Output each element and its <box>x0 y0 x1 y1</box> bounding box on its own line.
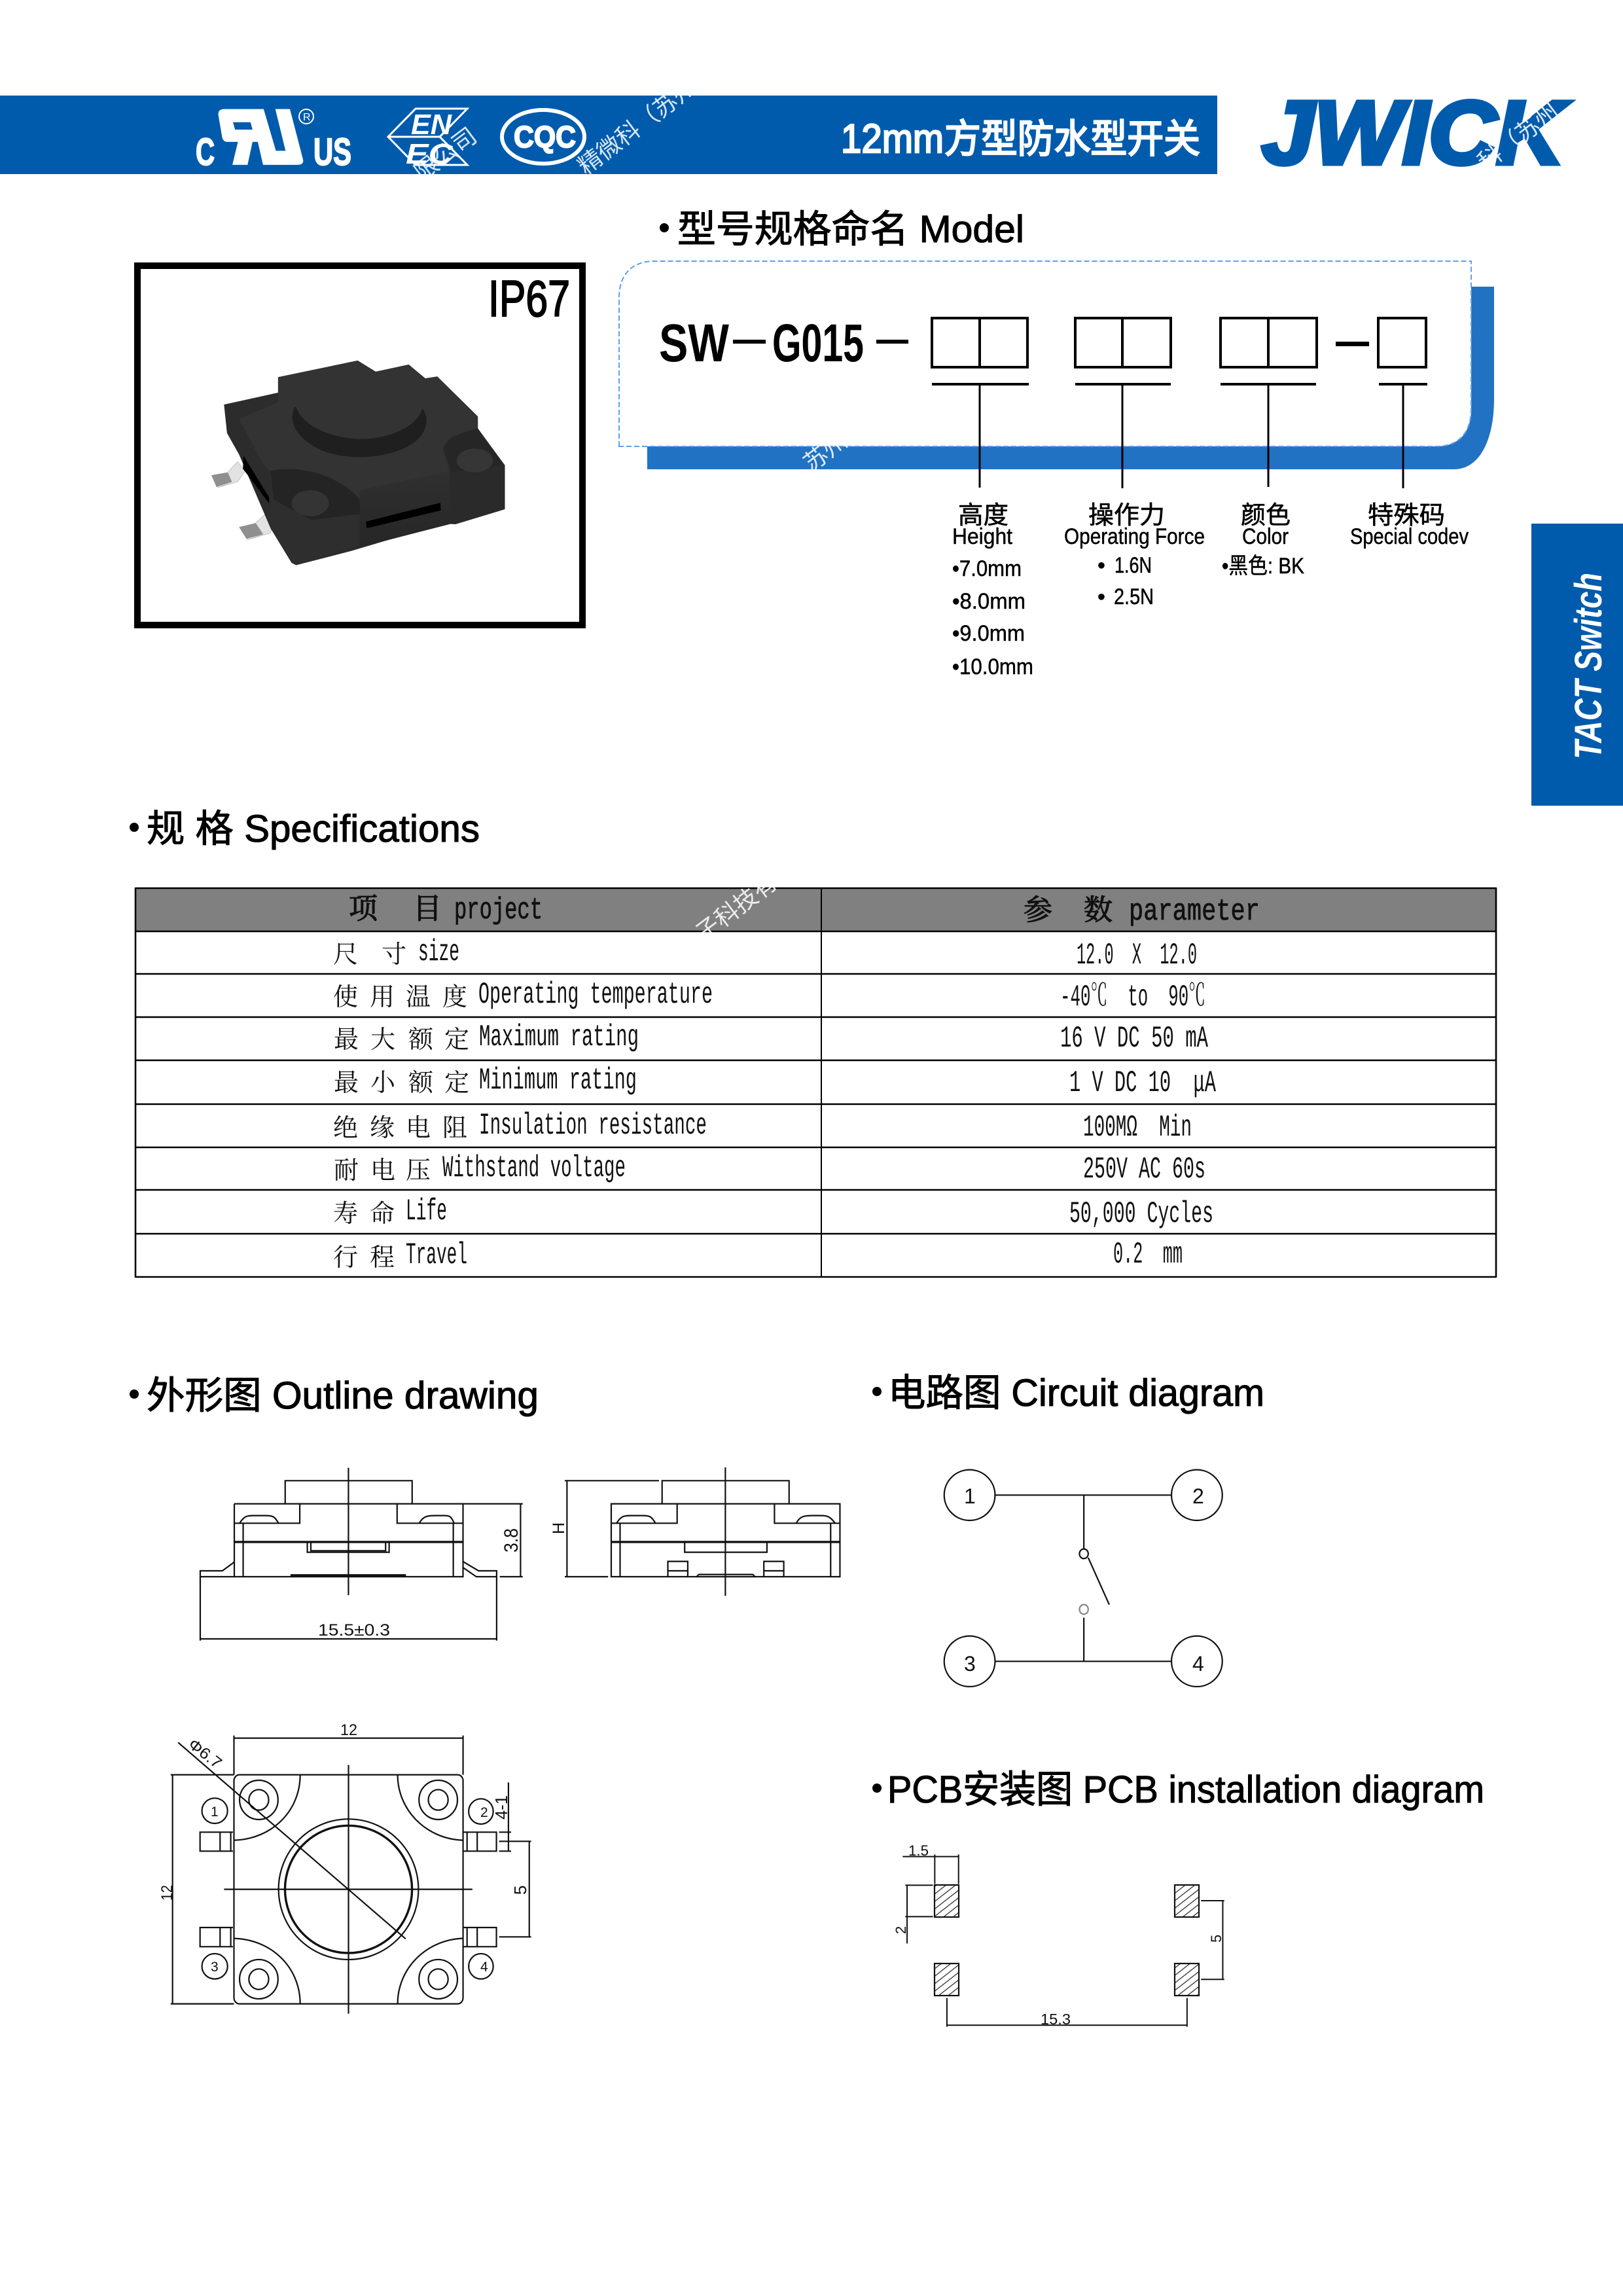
heading: Outline drawing: 外形图 Outline drawing <box>147 1374 539 1417</box>
terminal numbers: 4 <box>1192 1652 1204 1676</box>
row: insulation resistance: 100MΩ Min <box>1083 1111 1192 1145</box>
terminal numbers <box>964 1484 1204 1676</box>
model prefix SW-G015: SW <box>659 314 729 373</box>
column: color: Color <box>1242 524 1289 549</box>
row: travel <box>333 1238 1183 1272</box>
dimension: 5: 5 <box>510 1886 530 1895</box>
logo: JWICK: JWICK <box>1262 83 1570 183</box>
row: operating temperature <box>333 978 1205 1014</box>
row: life: 寿命 <box>333 1200 395 1228</box>
header band <box>0 96 1217 174</box>
leader lines <box>932 384 1427 488</box>
solder pads <box>935 1885 1199 1996</box>
row: operating temperature: Operating temperature <box>478 978 713 1012</box>
row: travel: 0.2 mm <box>1113 1238 1183 1272</box>
row: life: 50,000 Cycles <box>1069 1197 1213 1231</box>
table header: project: project <box>454 893 543 927</box>
row: travel: Travel <box>406 1238 467 1272</box>
row: size <box>333 935 1197 973</box>
column: height <box>952 495 1033 679</box>
dimension: 12 width: 12 <box>340 1721 357 1739</box>
row: travel: 行程 <box>333 1244 395 1272</box>
row: size: size <box>418 935 459 969</box>
row: withstand voltage <box>334 1151 1205 1187</box>
row: size: 尺寸 <box>333 941 406 969</box>
row: withstand voltage: Withstand voltage <box>442 1151 626 1185</box>
column: special code: Special codev <box>1350 524 1469 549</box>
column: height: Height <box>952 524 1013 549</box>
pin numbers: 4 <box>480 1960 488 1975</box>
row: maximum rating: Maximum rating <box>479 1020 639 1054</box>
header title: 方型防水型开关 <box>944 117 1200 161</box>
dimension: 4-1: 4-1 <box>491 1795 511 1820</box>
table header: parameter: parameter <box>1129 895 1260 929</box>
watermarks: 子科技有限 <box>687 850 802 948</box>
row: maximum rating <box>334 1020 1208 1056</box>
row: operating temperature: -40℃ to 90℃ <box>1060 980 1205 1014</box>
schematic linework <box>944 1470 1222 1687</box>
column: operating force: • <box>1097 584 1105 609</box>
table header: project: 项目 <box>349 893 442 925</box>
row: insulation resistance: 绝缘电阻 <box>333 1115 467 1142</box>
terminal numbers: 3 <box>964 1652 976 1676</box>
column: color <box>1222 495 1304 579</box>
heading: PCB installation diagram: PCB安装图 PCB installation diagram <box>887 1768 1484 1811</box>
dimension: 5: 5 <box>1208 1935 1224 1943</box>
column: height: •10.0mm <box>952 655 1033 679</box>
row: maximum rating: 最大额定 <box>334 1026 469 1054</box>
column: height: •9.0mm <box>952 621 1025 646</box>
column: operating force: Operating Force <box>1064 524 1205 549</box>
icon: tact switch render <box>211 361 505 565</box>
heading: Model: 型号规格命名 Model <box>677 208 1024 251</box>
icon: CQC certification mark: CQC <box>514 120 576 154</box>
column: operating force <box>1064 495 1205 609</box>
dimension: 2: 2 <box>893 1926 909 1934</box>
row: minimum rating: 1 V DC 10 μA <box>1069 1066 1216 1100</box>
icon: ENEC certification mark: EN <box>411 109 452 141</box>
chart: PCB footprint <box>893 1842 1224 2028</box>
panel: product photo <box>137 266 582 625</box>
dimension: 12 height: 12 <box>158 1885 176 1901</box>
row: minimum rating <box>334 1064 1216 1100</box>
dimension: 1.5: 1.5 <box>908 1842 929 1859</box>
icon: cULus certification mark: C <box>196 131 215 173</box>
heading: Circuit diagram: 电路图 Circuit diagram <box>888 1372 1264 1414</box>
pin numbers: 2 <box>480 1805 488 1820</box>
watermarks: 精微科（苏州） <box>569 55 722 181</box>
dimension: 15.3: 15.3 <box>1041 2011 1071 2028</box>
icon: CQC certification mark <box>502 110 584 164</box>
watermarks <box>406 55 1565 948</box>
chart: circuit diagram <box>944 1470 1222 1687</box>
icon: cULus certification mark: US <box>313 131 351 173</box>
row: insulation resistance: Insulation resistance <box>479 1109 707 1143</box>
icon: cULus certification mark: R <box>303 112 311 123</box>
row: insulation resistance <box>333 1109 1192 1145</box>
code boxes <box>932 318 1426 367</box>
column: height: •7.0mm <box>952 556 1022 581</box>
column: operating force: 2.5N <box>1114 584 1154 609</box>
column: color: •黑色: BK <box>1222 554 1304 579</box>
column: height: •8.0mm <box>952 589 1026 614</box>
model prefix SW-G015: G015 <box>772 314 864 373</box>
blue L-shaped band <box>647 287 1494 469</box>
icon: ENEC certification mark: EC <box>406 138 454 170</box>
icon: ENEC certification mark <box>388 109 467 170</box>
column: operating force: 操作力 <box>1088 495 1165 531</box>
side tab: TACT Switch: TACT Switch <box>1567 573 1610 759</box>
table header: project <box>349 893 543 927</box>
pin numbers: 1 <box>211 1804 219 1820</box>
watermarks: 科（苏州 <box>1469 94 1565 177</box>
column: operating force: • <box>1097 553 1105 578</box>
row: maximum rating: 16 V DC 50 mA <box>1060 1022 1208 1056</box>
watermarks: 限公司 <box>406 118 483 188</box>
row: minimum rating: 最小额定 <box>334 1069 469 1097</box>
terminal numbers: 2 <box>1192 1484 1204 1508</box>
header title: 12mm <box>841 117 944 162</box>
dimension: 3.8: 3.8 <box>501 1528 522 1552</box>
watermarks: 苏州 <box>795 423 853 478</box>
pin numbers <box>211 1804 488 1975</box>
table: specifications <box>135 888 1496 1278</box>
column: special code: 特殊码 <box>1368 495 1445 531</box>
panel: model naming code <box>619 261 1494 679</box>
table header: parameter <box>1024 894 1260 929</box>
column: operating force: 1.6N <box>1115 553 1152 578</box>
column: special code <box>1350 495 1469 549</box>
row: withstand voltage: 250V AC 60s <box>1083 1153 1205 1187</box>
row: operating temperature: 使用温度 <box>333 984 467 1011</box>
row: minimum rating: Minimum rating <box>479 1064 637 1098</box>
icon: cULus certification mark <box>196 109 351 173</box>
panel: outline side views <box>200 1467 840 1641</box>
dimension: 15.5±0.3: 15.5±0.3 <box>318 1621 390 1640</box>
row: life: Life <box>406 1194 447 1229</box>
drawing: left and right side view linework <box>200 1467 840 1641</box>
dimension: H: H <box>550 1522 568 1534</box>
side tab: TACT Switch <box>1531 524 1623 806</box>
header title <box>841 117 1200 162</box>
pin numbers: 3 <box>211 1960 219 1975</box>
row: withstand voltage: 耐电压 <box>334 1157 431 1185</box>
panel: outline top view <box>158 1721 531 2014</box>
row: life <box>333 1194 1213 1231</box>
dimension lines <box>902 1854 1224 2027</box>
column: color: 颜色 <box>1241 495 1291 531</box>
model prefix SW-G015 <box>659 314 908 373</box>
row: size: 12.0 X 12.0 <box>1077 939 1197 973</box>
column: height: 高度 <box>958 495 1008 531</box>
heading: Specifications: 规 格 Specifications <box>147 808 480 850</box>
terminal numbers: 1 <box>964 1484 976 1508</box>
table header: parameter: 参数 <box>1024 894 1113 926</box>
dimension: diameter 6.7: Φ6.7 <box>185 1735 225 1772</box>
drawing: top view linework <box>171 1736 531 2014</box>
dashed rounded frame <box>619 261 1471 446</box>
label: IP67: IP67 <box>488 270 570 327</box>
